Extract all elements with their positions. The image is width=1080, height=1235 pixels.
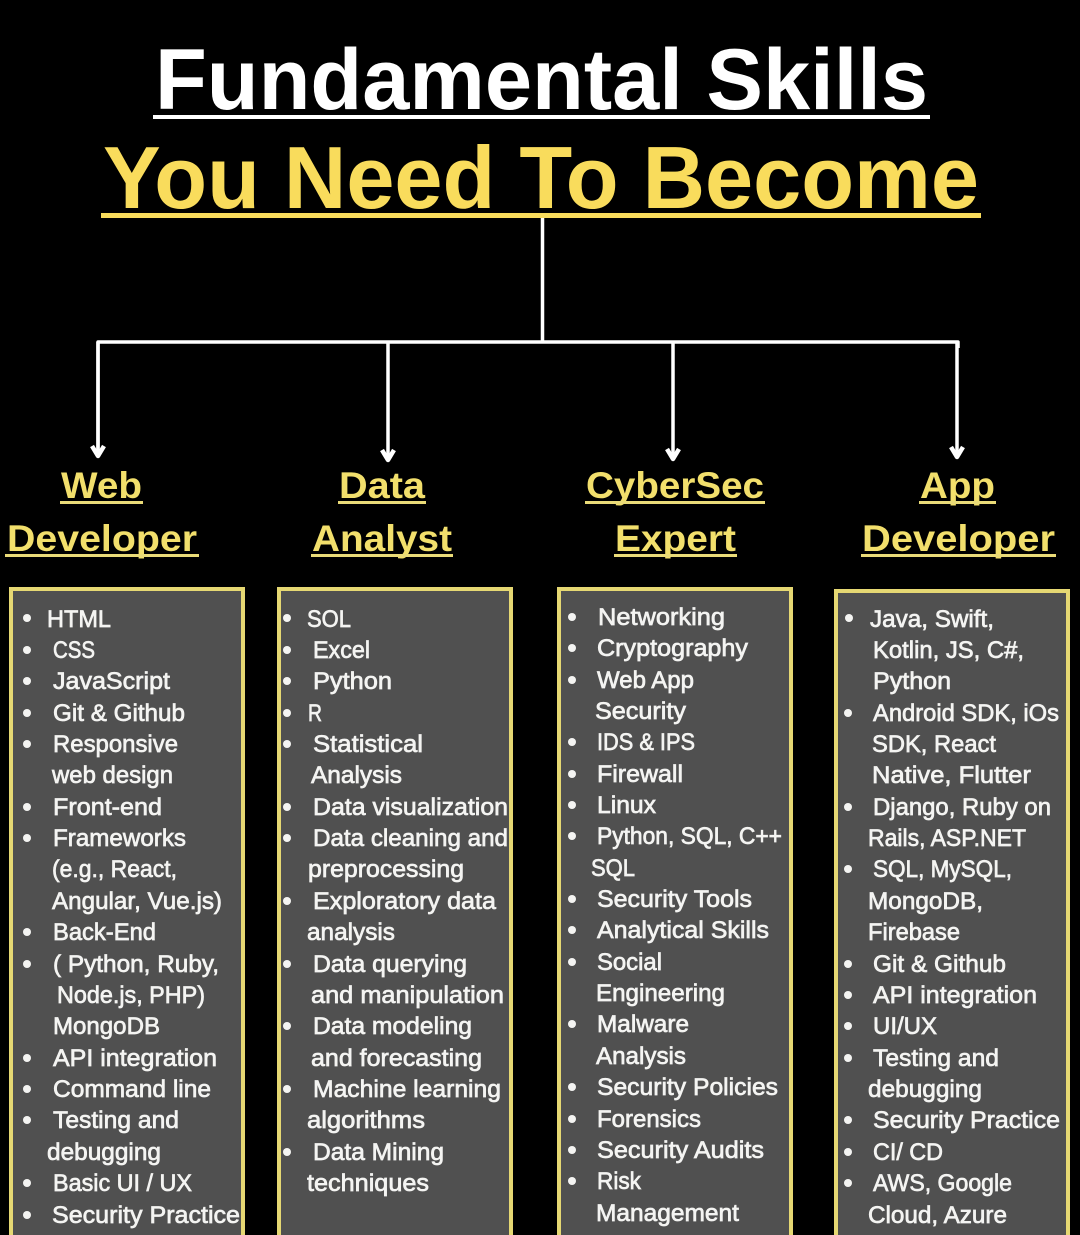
skill list: web developer: Front-end [53, 794, 162, 821]
skill list: app developer: debugging [868, 1076, 982, 1103]
skill list: cybersec expert: Security Audits [597, 1137, 764, 1164]
heading: web developer [5, 465, 199, 559]
skill list: data analyst: Data cleaning and [313, 825, 508, 852]
skill list: app developer: SDK, React [872, 731, 996, 758]
heading: cybersec expert: CyberSec [586, 465, 764, 506]
heading: cybersec expert [585, 465, 765, 559]
panel: cybersec expert skills [559, 589, 791, 1235]
skill list: cybersec expert: Risk [597, 1168, 642, 1195]
skill list: data analyst: R [308, 700, 322, 727]
skill list: data analyst: Data querying [313, 951, 467, 978]
skill list: cybersec expert: Social [597, 949, 662, 976]
skill list: cybersec expert: Security Tools [597, 886, 752, 913]
skill list: cybersec expert [568, 604, 782, 1227]
heading: app developer [861, 465, 1056, 559]
skill list: cybersec expert: Linux [597, 792, 656, 819]
skill list: app developer: Django, Ruby on [873, 794, 1051, 821]
skill list: data analyst: Statistical [313, 731, 423, 758]
skill list: cybersec expert: Networking [598, 604, 725, 631]
heading: data analyst: Analyst [312, 518, 452, 559]
skill list: data analyst: preprocessing [308, 856, 464, 883]
skill list: app developer [844, 606, 1060, 1229]
skill list: web developer: ( Python, Ruby, [53, 951, 219, 978]
skill list: data analyst: and forecasting [311, 1045, 482, 1072]
skill list: web developer: MongoDB [53, 1013, 160, 1040]
skill list: cybersec expert: Analysis [596, 1043, 686, 1070]
skill list: data analyst: analysis [307, 919, 395, 946]
heading: data analyst: Data [339, 465, 425, 506]
panel: web developer skills [11, 589, 243, 1235]
heading: app developer: App [920, 465, 995, 506]
skill list: data analyst: algorithms [307, 1107, 425, 1134]
skill list: data analyst [283, 606, 508, 1197]
skill list: cybersec expert: IDS & IPS [597, 729, 695, 756]
skill list: app developer: Python [873, 668, 951, 695]
skill list: app developer: UI/UX [873, 1013, 937, 1040]
skill list: app developer: Rails, ASP.NET [868, 825, 1026, 852]
skill list: cybersec expert: SQL [591, 855, 635, 882]
skill list: data analyst: and manipulation [311, 982, 504, 1009]
skill list: web developer: API integration [53, 1045, 217, 1072]
arrow: data analyst [382, 342, 394, 460]
arrow: app developer [951, 342, 963, 457]
skill list: cybersec expert: Python, SQL, C++ [597, 823, 782, 850]
heading: web developer: Web [61, 465, 142, 506]
skill list: app developer: CI/ CD [873, 1139, 943, 1166]
title [101, 32, 981, 227]
skill list: app developer: AWS, Google [873, 1170, 1012, 1197]
skill list: cybersec expert: Security Policies [597, 1074, 778, 1101]
skill list: data analyst: Data modeling [313, 1013, 472, 1040]
skill list: web developer: Back-End [53, 919, 156, 946]
skill list: app developer: Security Practice [873, 1107, 1060, 1134]
skill list: cybersec expert: Security [595, 698, 686, 725]
skill list: app developer: Testing and [873, 1045, 999, 1072]
skill list: web developer: web design [51, 762, 173, 789]
skill list: app developer: Kotlin, JS, C#, [873, 637, 1024, 664]
heading: cybersec expert: Expert [615, 518, 736, 559]
skill list: web developer: Command line [53, 1076, 211, 1103]
skill list: web developer: debugging [47, 1139, 161, 1166]
skill list: cybersec expert: Firewall [597, 761, 683, 788]
skill list: web developer [23, 606, 240, 1229]
heading: data analyst [311, 465, 453, 559]
skill list: app developer: MongoDB, [868, 888, 983, 915]
skill list: web developer: Security Practice [52, 1202, 240, 1229]
skill list: cybersec expert: Analytical Skills [597, 917, 769, 944]
skill list: web developer: Node.js, PHP) [57, 982, 205, 1009]
skill list: app developer: Java, Swift, [870, 606, 994, 633]
panel: app developer skills [836, 591, 1068, 1235]
skill list: data analyst: Exploratory data [313, 888, 497, 915]
skill list: data analyst: Excel [313, 637, 370, 664]
skill list: app developer: SQL, MySQL, [873, 856, 1012, 883]
skill list: data analyst: Data Mining [313, 1139, 444, 1166]
skill list: web developer: CSS [53, 637, 95, 664]
skill list: app developer: Native, Flutter [872, 762, 1031, 789]
skill list: data analyst: Machine learning [313, 1076, 501, 1103]
arrow: web developer [92, 342, 104, 456]
skill list: app developer: Cloud, Azure [868, 1202, 1007, 1229]
skill list: web developer: Basic UI / UX [53, 1170, 192, 1197]
skill list: cybersec expert: Web App [597, 667, 694, 694]
skill list: web developer: HTML [47, 606, 111, 633]
skill list: cybersec expert: Engineering [596, 980, 725, 1007]
heading: web developer: Developer [7, 518, 197, 559]
skill list: app developer: Firebase [868, 919, 960, 946]
skill list: cybersec expert: Management [596, 1200, 739, 1227]
skill list: web developer: Responsive [53, 731, 178, 758]
panel: data analyst skills [279, 589, 511, 1235]
skill list: app developer: Git & Github [873, 951, 1006, 978]
arrow: cybersec expert [667, 342, 679, 459]
skill list: cybersec expert: Cryptography [597, 635, 748, 662]
skill list: data analyst: Data visualization [313, 794, 508, 821]
skill list: data analyst: techniques [307, 1170, 429, 1197]
heading: app developer: Developer [862, 518, 1055, 559]
title line 1: Fundamental Skills [155, 32, 928, 128]
skill list: web developer: Git & Github [53, 700, 185, 727]
skill list: web developer: (e.g., React, [52, 856, 177, 883]
skill list: web developer: Frameworks [53, 825, 186, 852]
skill list: data analyst: Python [313, 668, 392, 695]
skill list: app developer: API integration [873, 982, 1037, 1009]
title line 2: You Need To Become [103, 128, 979, 227]
skill list: cybersec expert: Forensics [597, 1106, 701, 1133]
skill list: web developer: Testing and [53, 1107, 179, 1134]
skill list: web developer: JavaScript [53, 668, 170, 695]
skill list: web developer: Angular, Vue.js) [52, 888, 222, 915]
connector tree [92, 218, 963, 460]
skill list: cybersec expert: Malware [597, 1011, 689, 1038]
skill list: data analyst: SOL [307, 606, 351, 633]
skill list: data analyst: Analysis [311, 762, 402, 789]
skill list: app developer: Android SDK, iOs [873, 700, 1059, 727]
